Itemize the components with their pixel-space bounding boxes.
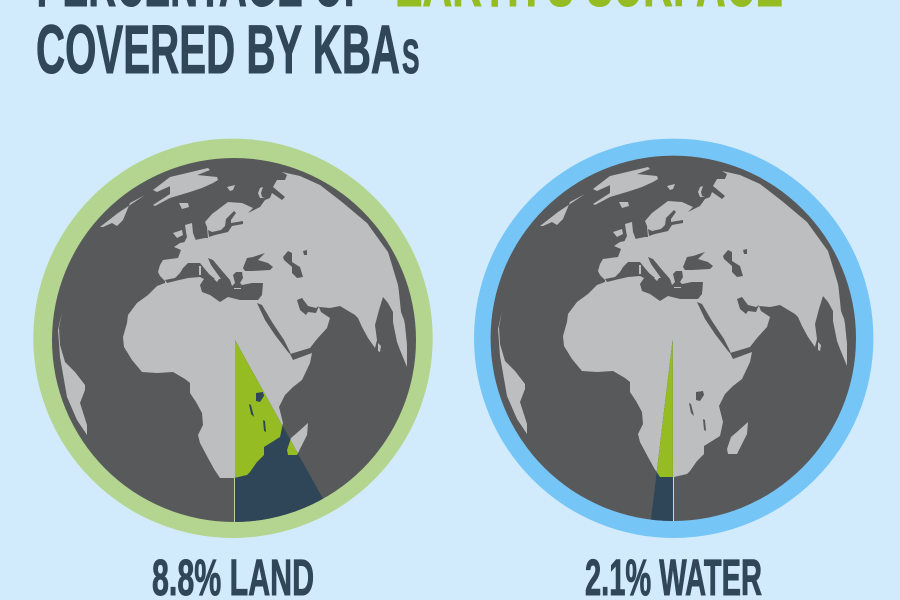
ring: water (474, 139, 873, 538)
wedge: 2.1% water (651, 340, 674, 521)
wedge: 8.8% land (234, 340, 323, 522)
title (36, 0, 783, 88)
ring: land (33, 139, 433, 538)
panel: water globe (474, 139, 873, 538)
globe: water (491, 156, 856, 521)
title line 2: COVERED BY KBA (36, 11, 400, 88)
title small s: S (402, 31, 420, 84)
panel: land globe (33, 139, 433, 538)
globe: land (52, 158, 416, 522)
